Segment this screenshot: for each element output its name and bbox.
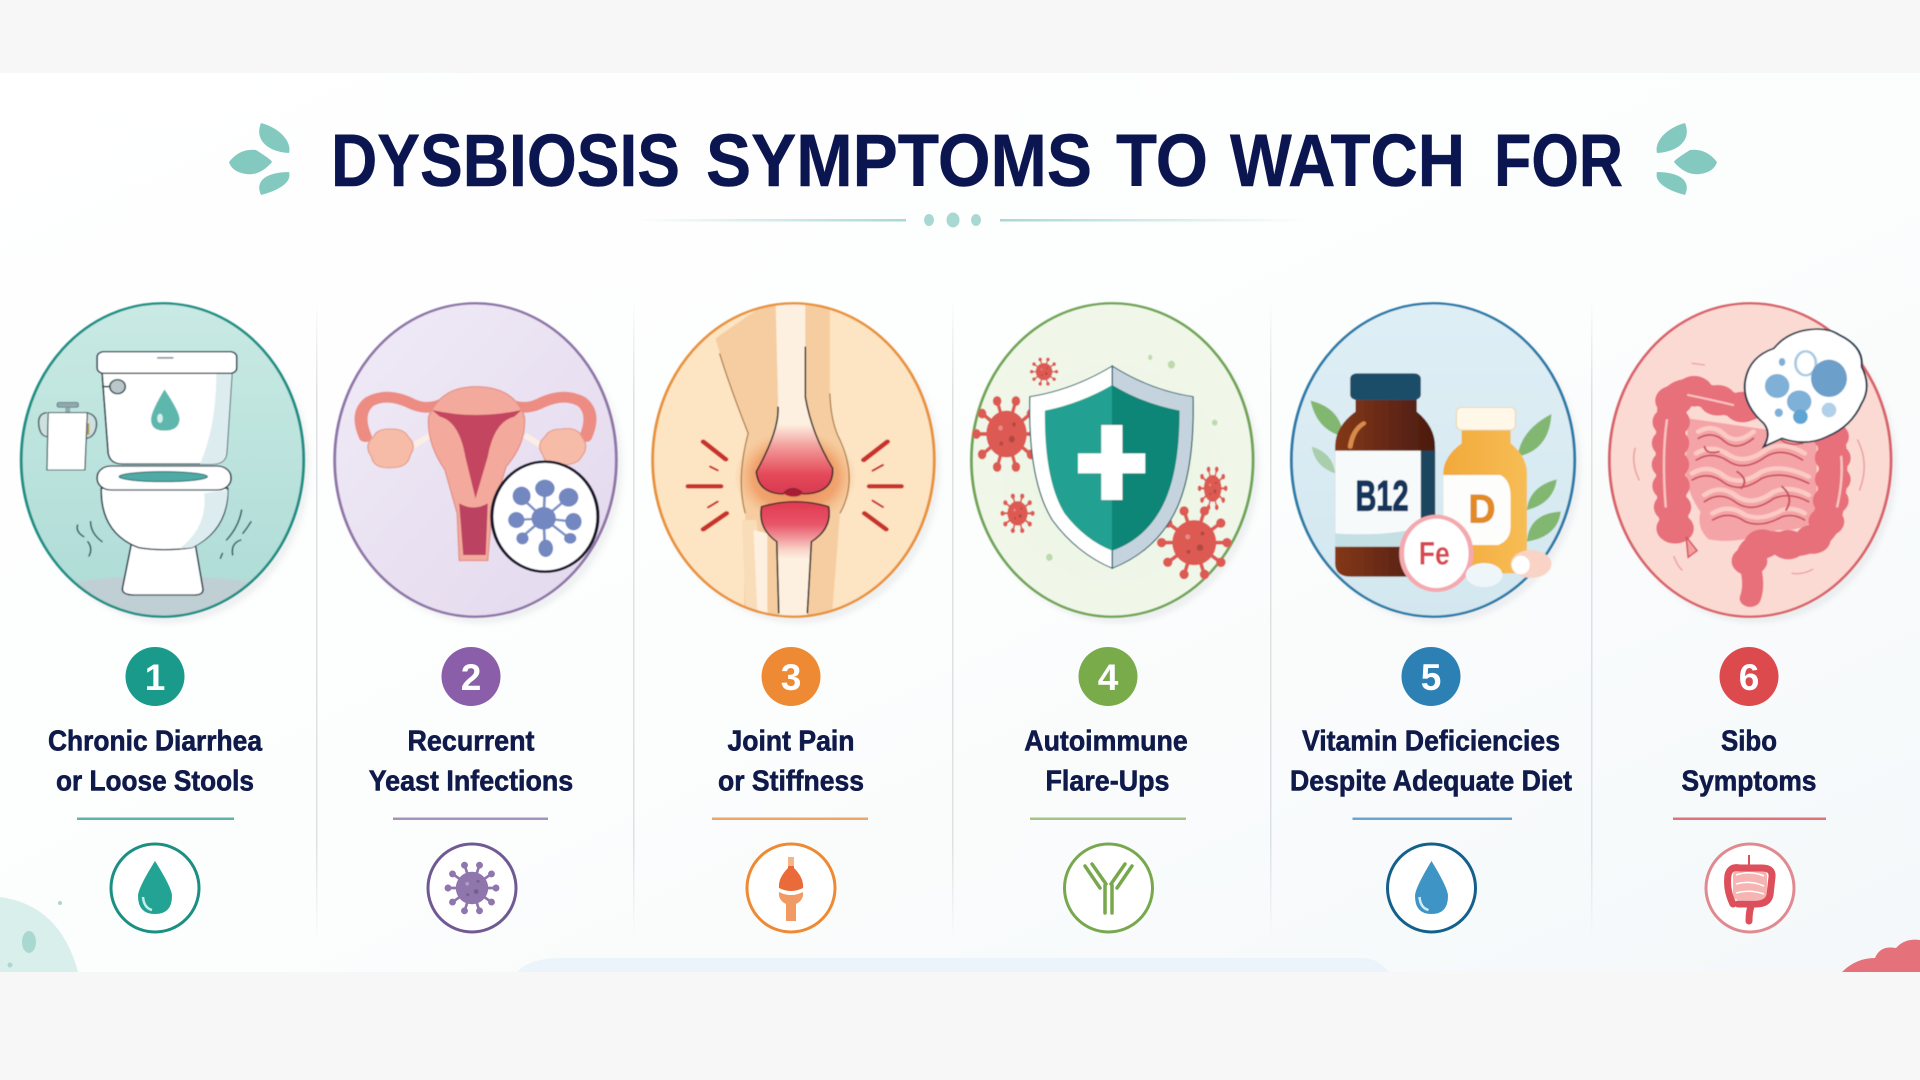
label: joint pain: [718, 726, 864, 798]
toilet paper roll: [39, 402, 97, 470]
title ornament: right leaves: [1657, 123, 1717, 195]
label: sibo symptoms: Sibo: [1721, 726, 1777, 758]
icon: knee joint: [747, 844, 835, 932]
column 3: joint pain: [653, 300, 940, 932]
corner decoration: intestine: [1842, 940, 1920, 972]
icon: water drop blue: [1388, 844, 1476, 932]
iron pill: Fe: [1419, 535, 1450, 571]
title: SYMPTOMS: [706, 119, 1092, 202]
number badge 3: 3: [781, 657, 801, 698]
label: vitamin deficiencies: Despite Adequate Diet: [1290, 766, 1572, 798]
toilet bowl: [122, 543, 203, 595]
label: sibo symptoms: Symptoms: [1682, 766, 1816, 798]
illustration: supplement bottles: [1291, 303, 1580, 623]
motion squiggles: [77, 510, 251, 558]
title ornament: left leaves: [229, 123, 289, 195]
corner decoration: teal specks: [8, 901, 62, 968]
toilet tank: [102, 373, 232, 464]
illustration: intestines with bacteria bubble: [1609, 303, 1897, 623]
label: recurrent yeast infections: Yeast Infections: [369, 766, 573, 798]
pain rays: [688, 442, 901, 529]
label: autoimmune flare-ups: Autoimmune: [1024, 726, 1188, 758]
column 5: vitamin deficiencies: [1290, 303, 1580, 932]
label: joint pain: or Stiffness: [718, 766, 864, 798]
label: recurrent yeast infections: Recurrent: [408, 726, 535, 758]
B12 bottle: [1335, 373, 1435, 577]
D bottle: D: [1469, 488, 1496, 532]
number badge 6: 6: [1739, 657, 1759, 698]
B12 bottle: B12: [1356, 473, 1409, 521]
label: joint pain: Joint Pain: [728, 726, 854, 758]
thought bubble with bacteria: [1745, 329, 1867, 447]
iron pill: [1402, 517, 1471, 590]
number badge 6: [1720, 647, 1778, 706]
icon: water drop teal: [111, 844, 199, 932]
title: DYSBIOSIS: [331, 119, 680, 202]
icon: yeast cell: [428, 844, 516, 932]
number badge 2: 2: [461, 657, 481, 698]
label: autoimmune flare-ups: Flare-Ups: [1046, 766, 1170, 798]
label: vitamin deficiencies: Vitamin Deficiencies: [1302, 726, 1560, 758]
label: chronic diarrhea: [48, 726, 263, 798]
number badge 5: [1402, 647, 1460, 706]
title: WATCH: [1230, 119, 1465, 202]
icon: intestines: [1706, 844, 1794, 932]
column 1: chronic diarrhea: [21, 303, 309, 932]
number badge 2: [442, 647, 500, 706]
leaves: [1311, 401, 1561, 542]
column 6: sibo symptoms: [1609, 303, 1897, 932]
viruses: [974, 358, 1230, 577]
label: chronic diarrhea: Chronic Diarrhea: [48, 726, 263, 758]
column 4: autoimmune flare-ups: [971, 303, 1259, 932]
infographic: [0, 123, 1920, 972]
label: sibo symptoms: [1682, 726, 1816, 798]
number badge 1: [126, 647, 184, 706]
illustration: uterus with yeast: [335, 303, 622, 623]
column 2: recurrent yeast infections: [335, 303, 622, 932]
magnifier with yeast: [492, 462, 598, 572]
number badge 4: [1078, 647, 1138, 706]
icon: antibody: [1064, 844, 1152, 932]
number badge 1: 1: [145, 657, 165, 698]
illustration: shield with viruses: [971, 303, 1259, 623]
title: TO: [1116, 119, 1208, 202]
D bottle: [1443, 407, 1527, 573]
label: vitamin deficiencies: [1290, 726, 1572, 798]
label: recurrent yeast infections: [369, 726, 573, 798]
number badge 5: 5: [1421, 657, 1441, 698]
shield: [1030, 366, 1193, 568]
label: chronic diarrhea: or Loose Stools: [56, 766, 254, 798]
title divider with dots: [636, 212, 1305, 228]
title: [331, 119, 1623, 202]
title: FOR: [1494, 119, 1623, 202]
number badge 3: [762, 647, 820, 706]
illustration: toilet: [21, 303, 309, 623]
label: autoimmune flare-ups: [1024, 726, 1188, 798]
colon: [1670, 391, 1749, 528]
number badge 4: 4: [1098, 657, 1119, 698]
illustration: inflamed knee: [653, 300, 940, 623]
